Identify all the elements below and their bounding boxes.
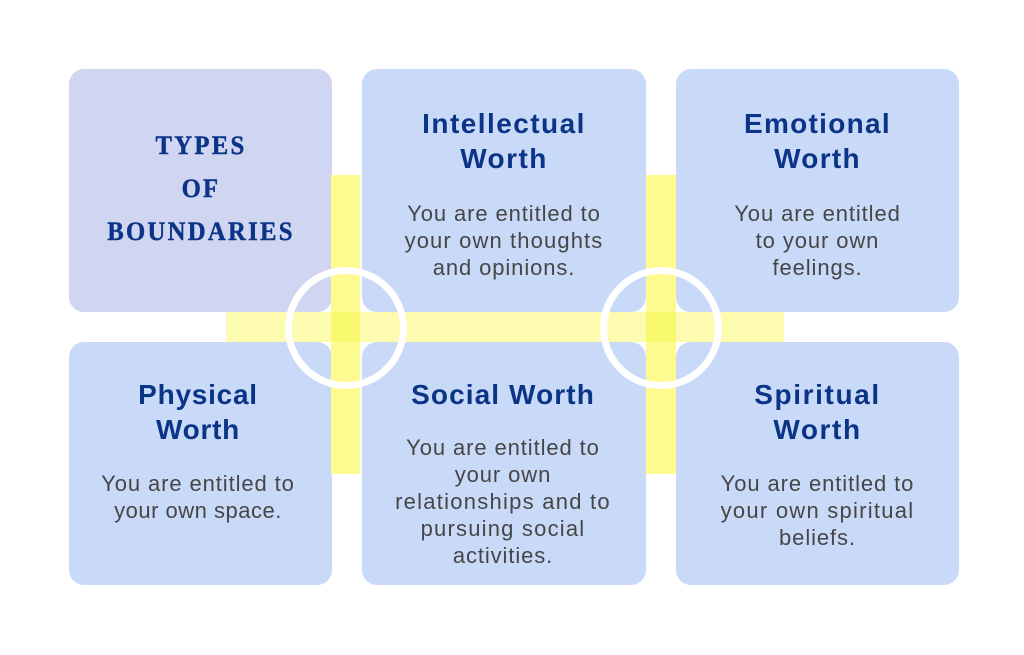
heading: physical worth — [138, 379, 258, 445]
heading: emotional worth: Emotional — [744, 108, 891, 139]
right circle ring — [600, 267, 722, 389]
text: intellectual worth: and opinions. — [433, 255, 575, 280]
text: spiritual worth: beliefs. — [779, 525, 856, 550]
text: intellectual worth: You are entitled to — [407, 201, 601, 226]
text: physical worth: your own space. — [114, 498, 282, 523]
text: spiritual worth: your own spiritual — [721, 498, 914, 523]
text: social worth: You are entitled to — [406, 435, 600, 460]
text: social worth: pursuing social — [421, 516, 585, 541]
text: social worth: relationships and to — [395, 489, 611, 514]
heading: intellectual worth: Intellectual — [422, 108, 586, 139]
heading: physical worth: Physical — [138, 379, 258, 410]
title — [107, 131, 295, 246]
panel: social worth — [362, 342, 646, 585]
title: OF — [182, 174, 220, 203]
panel: emotional worth — [676, 69, 959, 312]
text: spiritual worth — [720, 471, 914, 550]
text: emotional worth — [734, 201, 901, 280]
heading: emotional worth — [744, 108, 891, 174]
text: social worth: activities. — [453, 543, 553, 568]
text: physical worth — [101, 471, 295, 523]
heading: intellectual worth: Worth — [460, 143, 548, 174]
text: spiritual worth: You are entitled to — [721, 471, 914, 496]
left vertical connector bar — [331, 175, 360, 474]
text: emotional worth: feelings. — [772, 255, 863, 280]
text: social worth — [395, 435, 611, 568]
text: social worth: your own — [455, 462, 551, 487]
title: TYPES — [155, 131, 247, 160]
panel: intellectual worth — [362, 69, 646, 312]
heading: physical worth: Worth — [156, 414, 240, 445]
right intersection highlight — [646, 312, 676, 342]
heading: spiritual worth: Worth — [773, 414, 862, 445]
text: intellectual worth: your own thoughts — [405, 228, 603, 253]
heading: spiritual worth: Spiritual — [754, 379, 881, 410]
title: BOUNDARIES — [107, 217, 295, 246]
right vertical connector bar — [646, 175, 676, 474]
text: emotional worth: You are entitled — [734, 201, 901, 226]
panel: types of boundaries — [69, 69, 332, 312]
text: physical worth: You are entitled to — [101, 471, 295, 496]
heading: emotional worth: Worth — [774, 143, 861, 174]
heading: social worth: Social Worth — [411, 379, 595, 410]
text: emotional worth: to your own — [756, 228, 879, 253]
heading: intellectual worth — [422, 108, 586, 174]
text: intellectual worth — [404, 201, 603, 280]
left circle ring — [285, 267, 407, 389]
left intersection highlight — [331, 312, 360, 342]
horizontal connector bar — [226, 312, 784, 342]
panel: spiritual worth — [676, 342, 959, 585]
heading: spiritual worth — [754, 379, 881, 445]
panel: physical worth — [69, 342, 332, 585]
